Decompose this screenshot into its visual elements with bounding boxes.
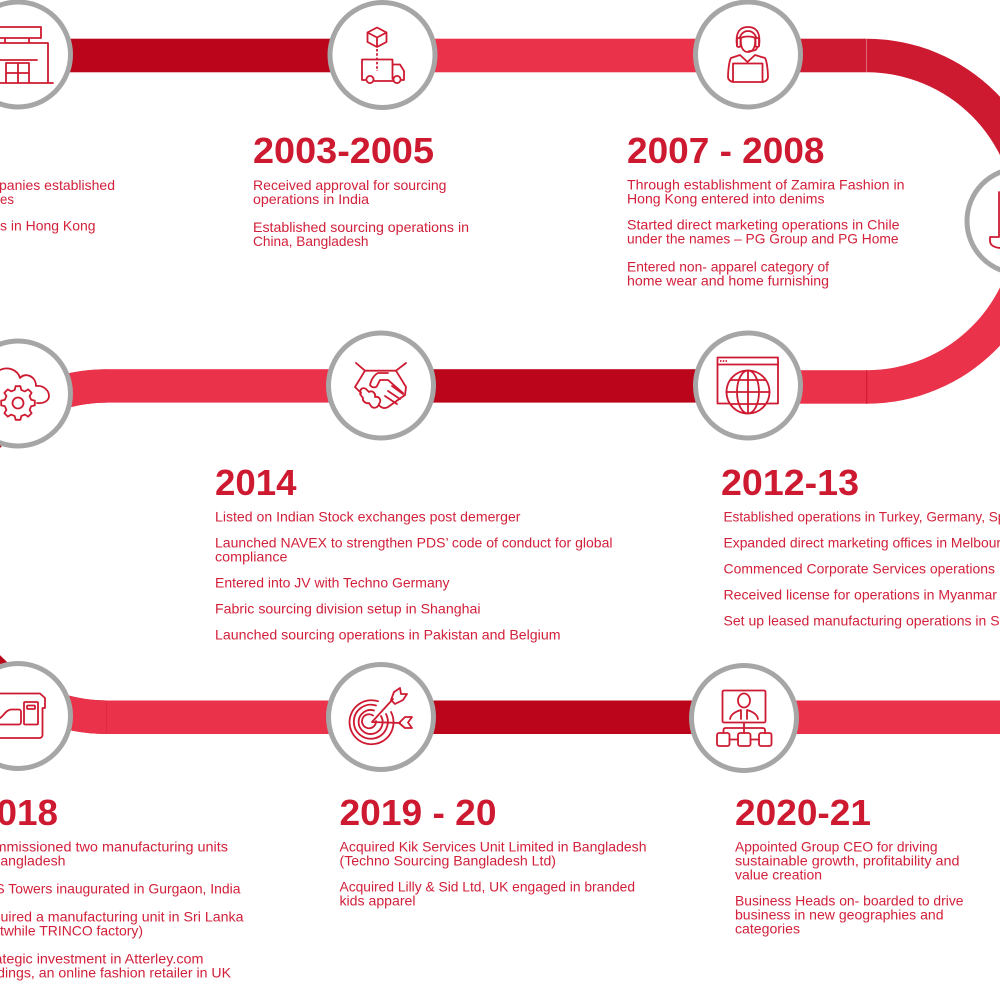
text block: 2003-2005: operations in India [253,191,369,207]
text block: 2014: Entered into JV with Techno Germany [215,575,450,591]
milestone: first period (store) [0,2,115,234]
icon: globe in browser window [718,358,778,414]
text block: 2003-2005: Received approval for sourcing [253,177,446,193]
text block: 2020-21: sustainable growth, profitability and [735,852,960,868]
text block: 2020-21: value creation [735,866,822,882]
icon: sewing machine [0,694,45,738]
text block: 2014: Launched NAVEX to strengthen PDS’ code of conduct for global [215,535,612,551]
text block: 2020-21: Appointed Group CEO for driving [735,838,938,854]
heading: 2007 - 2008: 2007 - 2008 [627,130,824,171]
milestone: right turn circle [967,168,1000,274]
text block: 2014: Launched sourcing operations in Pakistan and Belgium [215,627,560,643]
text block: 2020-21 [735,838,964,936]
milestone: 2003-2005 [253,2,469,249]
icon: partial device [990,192,1000,248]
heading: 2019 - 20: 2019 - 20 [340,792,496,833]
text block: 2019 - 20 [340,838,646,908]
text block: 2019 - 20: kids apparel [340,892,416,908]
milestone: 2012-13 [696,333,1000,629]
text block: 2014: Fabric sourcing division setup in Shanghai [215,601,480,617]
text block: 2014: compliance [215,549,288,565]
text block: first period: es [0,191,14,207]
text block: 2012-13: Received license for operations in Myanmar [724,587,997,603]
text block: 2007 - 2008: Started direct marketing operations in Chile [627,216,900,232]
text block: 2007 - 2008: Through establishment of Zamira Fashion in [627,176,904,192]
text block: 2003-2005: Established sourcing operations in [253,219,469,235]
heading: 2020-21: 2020-21 [735,792,871,833]
text block: 2007 - 2008: under the names – PG Group and PG Home [627,230,899,246]
text block: 2014 [215,509,612,643]
text block: 2014: Listed on Indian Stock exchanges post demerger [215,509,521,525]
timeline track [0,39,1000,734]
text block: 2020-21: categories [735,920,800,936]
text block: 2007 - 2008: Entered non- apparel category of [627,258,829,274]
text block: first period [0,177,115,234]
icon: store [0,27,53,83]
text block: 2012-13: Commenced Corporate Services operations [724,561,995,577]
heading: 2012-13: 2012-13 [721,462,859,503]
milestone: 2019 - 20 [328,664,646,908]
icon: handshake [355,363,406,408]
icon: headset operator [728,27,768,82]
text block: first period: panies established [0,177,115,193]
text block: 2020-21: business in new geographies and [735,906,944,922]
icon: presenter on screen with org chart [717,690,772,746]
text block: 2019 - 20: Acquired Lilly & Sid Ltd, UK engaged in branded [340,878,635,894]
text block: 2012-13 [724,509,1000,629]
text block: 2007 - 2008: Hong Kong entered into denims [627,190,824,206]
text block: 2003-2005 [253,177,469,249]
text block: 2019 - 20: (Techno Sourcing Bangladesh Ltd) [340,852,556,868]
milestone: 2020-21 [692,666,964,936]
milestone: cloud gear circle [0,341,70,446]
icon: cloud and gear [0,368,49,420]
text block: 2007 - 2008 [627,176,904,288]
milestone: 2007 - 2008 [627,2,904,288]
text block: 2019 - 20: Acquired Kik Services Unit Limited in Bangladesh [340,838,646,854]
icon: parcel and truck [362,28,404,83]
text block: first period: s in Hong Kong [0,218,96,234]
milestone: 2018 [0,664,244,980]
icon: target with arrows [350,688,412,744]
text block: 2018 [0,838,244,980]
text block: 2007 - 2008: home wear and home furnishing [627,272,829,288]
text block: 2020-21: Business Heads on- boarded to drive [735,892,964,908]
heading: 2003-2005: 2003-2005 [253,130,434,171]
text block: 2003-2005: China, Bangladesh [253,233,368,249]
milestone: 2014 [215,333,612,643]
heading: 2014: 2014 [215,462,296,503]
